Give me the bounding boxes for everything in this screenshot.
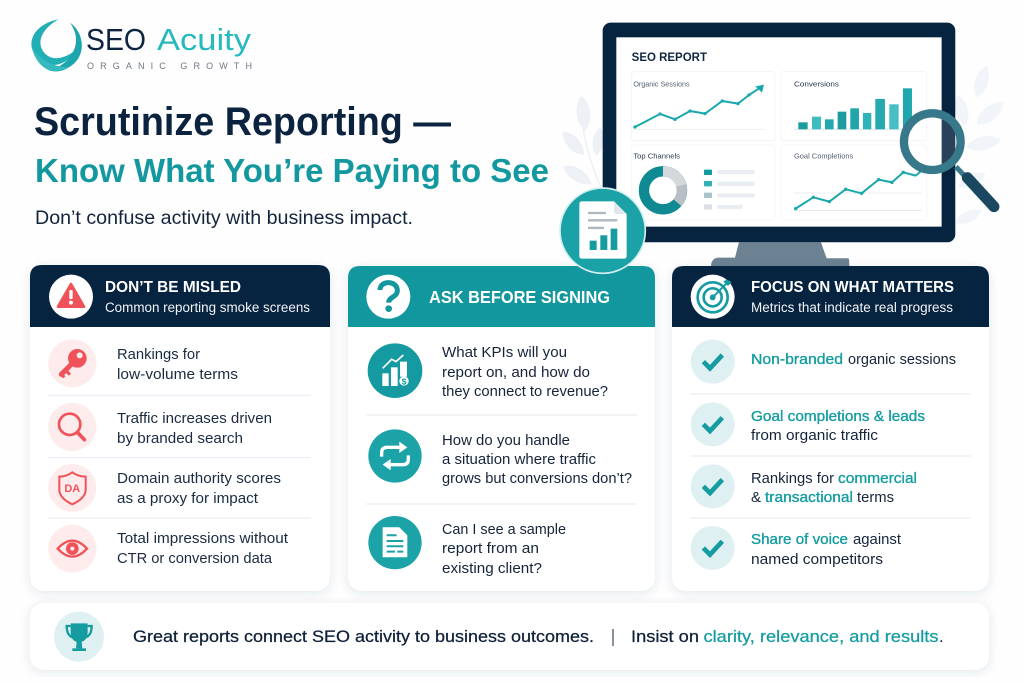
item: share of voice: against [853, 531, 902, 548]
item: sample report [368, 516, 566, 577]
panel header navy [30, 265, 330, 327]
item: traffic vs conversions [368, 429, 632, 487]
card: conversions bar chart [781, 72, 927, 141]
item: share of voice: Share of voice [751, 531, 848, 548]
footer statement: Great reports connect SEO activity to business outcomes. [133, 628, 594, 646]
footer highlight: clarity, relevance, and results [704, 628, 938, 646]
item: traffic vs conversions: How do you handle [442, 432, 570, 449]
icon: report document badge [560, 188, 645, 273]
header title: ASK BEFORE SIGNING [429, 287, 610, 307]
item: domain authority: Domain authority scores [117, 470, 281, 487]
item: commercial terms: transactional [765, 489, 853, 506]
decorative leaves and monitor illustration [558, 23, 1008, 267]
monitor stand [711, 242, 849, 267]
item: rankings: low-volume terms [117, 366, 238, 383]
panel header navy [672, 266, 989, 327]
item: impressions: Total impressions without [117, 530, 289, 547]
item: non-branded: organic sessions [848, 351, 956, 368]
subtitle heading: Know What You’re Paying to See [35, 152, 549, 189]
item: commercial terms: terms [857, 489, 894, 506]
leaves right [952, 64, 1008, 228]
card: organic sessions: Organic Sessions [633, 80, 690, 89]
item: domain authority [48, 464, 281, 512]
icon: logo swoosh [31, 19, 82, 71]
item: domain authority: DA [64, 483, 80, 495]
logo tagline: ORGANIC GROWTH [87, 61, 252, 71]
icon: question [366, 275, 410, 319]
callout: footer banner [30, 603, 989, 670]
logo: SEO Acuity [31, 19, 252, 71]
monitor screen [616, 37, 942, 227]
item: sample report: Can I see a sample [442, 521, 566, 538]
item: traffic: Traffic increases driven [117, 410, 272, 427]
header title: DON’T BE MISLED [105, 279, 241, 296]
header subtitle: Common reporting smoke screens [105, 300, 310, 315]
item: commercial terms: commercial [838, 470, 917, 487]
card: goal completions [781, 145, 927, 220]
panel header teal [348, 266, 655, 327]
item: traffic vs conversions: grows but conversions don’t? [442, 470, 632, 487]
item: traffic: by branded search [117, 430, 243, 447]
card: top channels donut: Top Channels [633, 152, 680, 161]
item: commercial terms: Rankings for [751, 470, 834, 487]
item: rankings [48, 339, 238, 387]
item: KPIs: they connect to revenue? [442, 383, 608, 400]
item: KPIs: report on, and how do [442, 364, 590, 381]
icon: magnifying glass [904, 113, 994, 207]
item: non-branded: Non-branded [751, 351, 843, 368]
item: goal completions: from organic traffic [751, 427, 879, 444]
card: top channels donut [632, 145, 775, 220]
item: KPIs [368, 343, 608, 400]
monitor frame [603, 23, 955, 242]
item: share of voice: named competitors [751, 551, 883, 568]
item: traffic vs conversions: a situation where traffic [442, 451, 596, 468]
title: Scrutinize Reporting — [34, 100, 451, 144]
item: sample report: existing client? [442, 560, 542, 577]
logo wordmark: SEO [86, 22, 146, 57]
item: rankings: Rankings for [117, 346, 200, 363]
header subtitle: Metrics that indicate real progress [751, 300, 953, 315]
item: impressions [48, 525, 289, 573]
panel: don't be misled [30, 265, 330, 591]
item: goal completions [691, 402, 925, 446]
logo wordmark accent: Acuity [157, 22, 252, 57]
card: goal completions: Goal Completions [794, 152, 853, 161]
item: traffic [48, 403, 272, 451]
footer period: . [939, 628, 944, 646]
report heading: SEO REPORT [632, 50, 707, 64]
icon: target [691, 275, 735, 319]
icon: trophy [54, 612, 104, 662]
item: KPIs: What KPIs will you [442, 344, 567, 361]
item: KPIs: $ [402, 376, 407, 386]
item: commercial terms [691, 464, 917, 508]
item: sample report: report from an [442, 540, 539, 557]
item: commercial terms: & [751, 489, 761, 506]
card: conversions bar chart: Conversions [794, 80, 839, 89]
panel: ask before signing [348, 266, 655, 591]
item: domain authority: as a proxy for impact [117, 490, 259, 507]
header title: FOCUS ON WHAT MATTERS [751, 279, 954, 296]
item: non-branded [691, 340, 956, 384]
item: share of voice [691, 526, 902, 570]
card: organic sessions [632, 72, 775, 141]
panel: focus on what matters [672, 266, 989, 591]
item: impressions: CTR or conversion data [117, 550, 273, 567]
footer insist lead-in: Insist on [631, 628, 699, 646]
leaves left [558, 95, 606, 189]
icon: warning [49, 275, 93, 319]
item: goal completions: Goal completions & leads [751, 408, 925, 425]
tagline: Don’t confuse activity with business impact. [35, 207, 413, 229]
